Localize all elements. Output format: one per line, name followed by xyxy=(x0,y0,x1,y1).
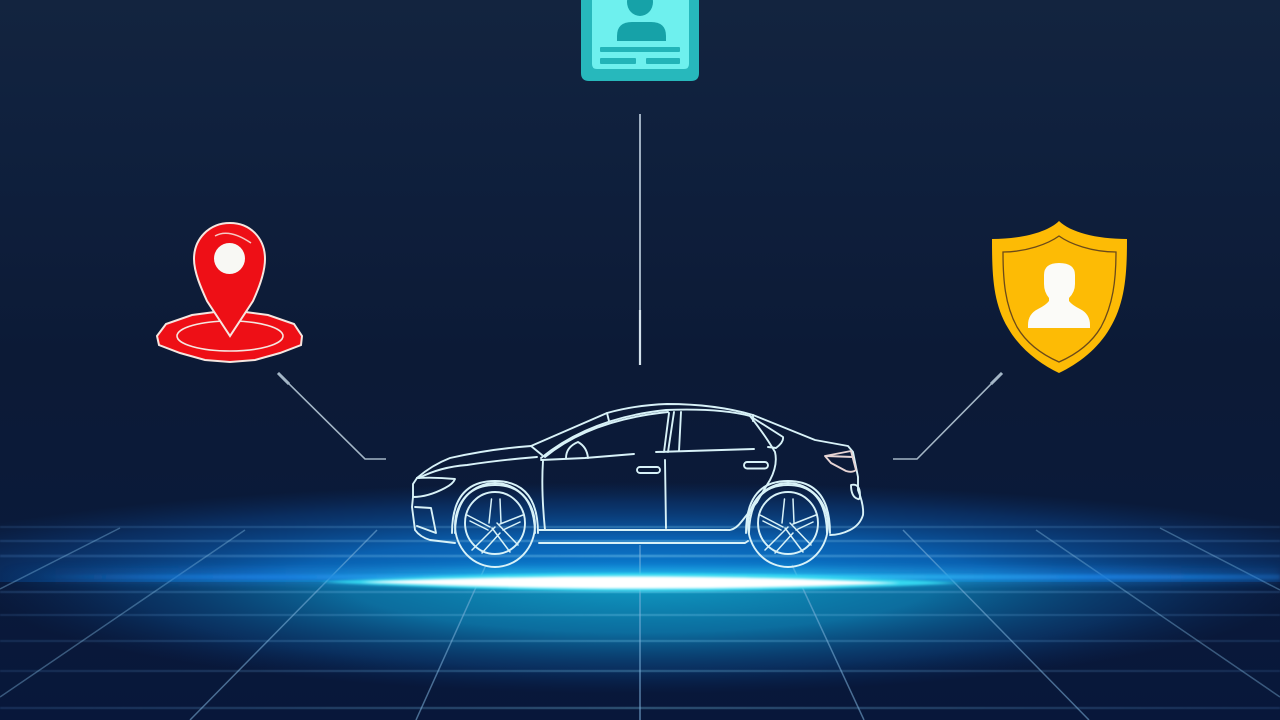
icon: ID badge xyxy=(581,0,699,81)
icon: location pin xyxy=(157,223,302,362)
car body xyxy=(412,404,863,543)
floor glow xyxy=(0,487,1280,686)
car outline xyxy=(412,404,863,567)
connector: top xyxy=(639,114,641,365)
tail light xyxy=(825,451,856,472)
light streak xyxy=(0,568,1280,591)
front wheel xyxy=(452,481,538,567)
rear wheel xyxy=(746,481,830,567)
door handles xyxy=(637,462,768,473)
icon: shield with person xyxy=(992,221,1127,373)
perspective grid floor xyxy=(0,527,1280,720)
connector: right xyxy=(893,373,1002,459)
connector: left xyxy=(278,373,386,459)
